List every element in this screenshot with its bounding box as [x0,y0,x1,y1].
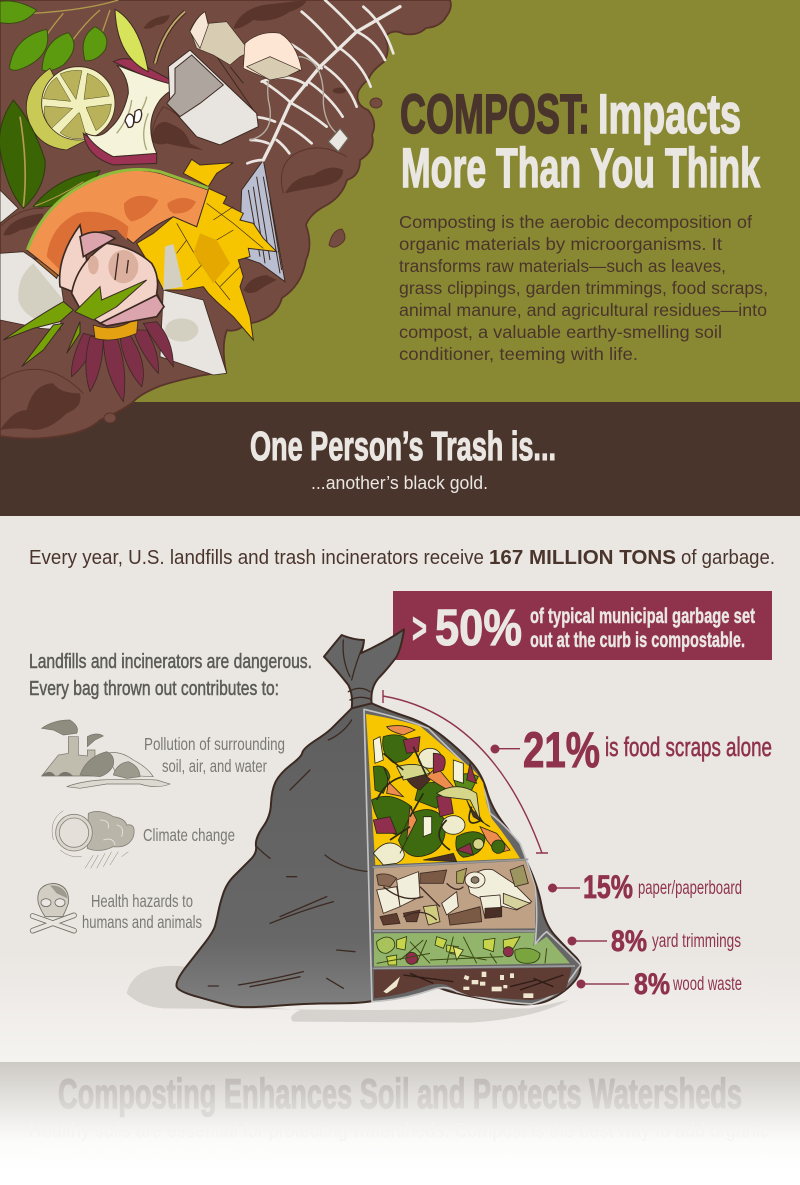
icon: climate change [52,811,134,868]
title: COMPOST: COMPOST: [400,82,590,145]
layer: yard trimmings [374,933,570,967]
background: olive header [0,0,800,402]
callout: 8 percent wood waste: wood waste [672,974,742,995]
callout: over 50 percent: > [412,604,427,653]
background: lower section [0,516,800,1062]
callout: 8 percent yard trimmings: yard trimmings [652,931,741,952]
cutaway dividers [373,859,575,968]
title [400,82,761,199]
bag knot and neck [324,629,404,708]
statement: 167 million tons: Every year, U.S. landfills and trash incinerators receive [29,546,484,569]
label: climate change: Climate change [143,825,235,845]
dark green leaves [0,100,100,208]
label: pollution: soil, air, and water [162,756,267,776]
intro paragraph: conditioner, teeming with life. [399,344,638,364]
label: pollution: Pollution of surrounding [144,734,285,754]
text: landfills warning: Every bag thrown out contributes to: [29,678,279,700]
intro paragraph: organic materials by microorganisms. It [399,234,722,254]
milk carton [167,50,258,145]
callout: 21 percent food scraps [383,690,772,853]
bracket arc [383,690,548,853]
torn paper [0,190,227,375]
sprig of leaves [0,0,118,71]
intro paragraph: Composting is the aerobic decomposition of [399,212,752,232]
callout: 15 percent paper [548,869,742,905]
statement: 167 million tons [29,546,775,569]
eggshells [190,12,302,80]
layer: food scraps [366,714,520,865]
rose [60,225,164,326]
banner heading: One Person’s Trash is... [250,423,556,469]
banner subheading: ...another’s black gold. [311,473,488,493]
intro paragraph [399,212,768,364]
callout: 21 percent food scraps: 21% [523,722,600,778]
callout: over 50 percent: 50% [435,599,522,656]
callout: 8 percent wood waste: 8% [634,968,670,1001]
bag folds [208,640,371,988]
soil ridge lines [0,107,347,393]
callout: 8 percent yard trimmings [568,925,741,958]
bag shadow [127,966,568,1023]
illustration: compost pile [0,0,451,438]
garbage bag illustration [127,629,581,1023]
cutaway outline [364,709,581,1004]
callout: over 50 percent [393,591,772,660]
callout: 8 percent yard trimmings: 8% [611,925,647,958]
intro paragraph: compost, a valuable earthy-smelling soil [399,322,722,342]
statement: 167 million tons: of garbage. [681,546,775,569]
intro paragraph: grass clippings, garden trimmings, food scraps, [399,278,768,298]
label: health hazards: Health hazards to [91,891,193,911]
dried flower [71,317,173,402]
soil crumbs [104,98,382,423]
lemon [26,67,115,150]
callout: 8 percent wood waste [576,968,742,1001]
text: landfills warning: Landfills and incinerators are dangerous. [29,651,312,673]
text: landfills warning [29,651,312,700]
label: health hazards: humans and animals [82,912,202,932]
icon: factory pollution [42,720,170,788]
intro paragraph: transforms raw materials—such as leaves, [399,256,726,276]
faded section text: matter to soil and build soil life. [29,1143,274,1165]
callout: 15 percent paper: paper/paperboard [638,878,742,899]
icon: skull and crossbones [33,883,74,931]
intro paragraph: animal manure, and agricultural residues—into [399,300,767,320]
layer: wood waste [374,968,572,1000]
callout: 15 percent paper: 15% [583,869,633,905]
tea bag string [250,57,348,152]
dark soil patches [0,0,346,430]
fish skeleton [247,0,400,163]
layer: paper [374,861,535,929]
background: faded next section [0,1062,800,1185]
bag body [176,703,580,1007]
soil mass [0,0,451,438]
yellow maple leaf [137,159,277,340]
label: pollution [144,734,285,776]
fish tail [207,160,285,282]
faded section text [29,1120,769,1165]
statement: 167 million tons: 167 MILLION TONS [489,546,676,569]
green stem and sepals [3,280,147,367]
apple core [83,9,185,165]
banner: dark brown band [0,402,800,516]
cantaloupe slice [27,169,208,278]
leader [490,744,500,754]
label: health hazards [82,891,202,932]
